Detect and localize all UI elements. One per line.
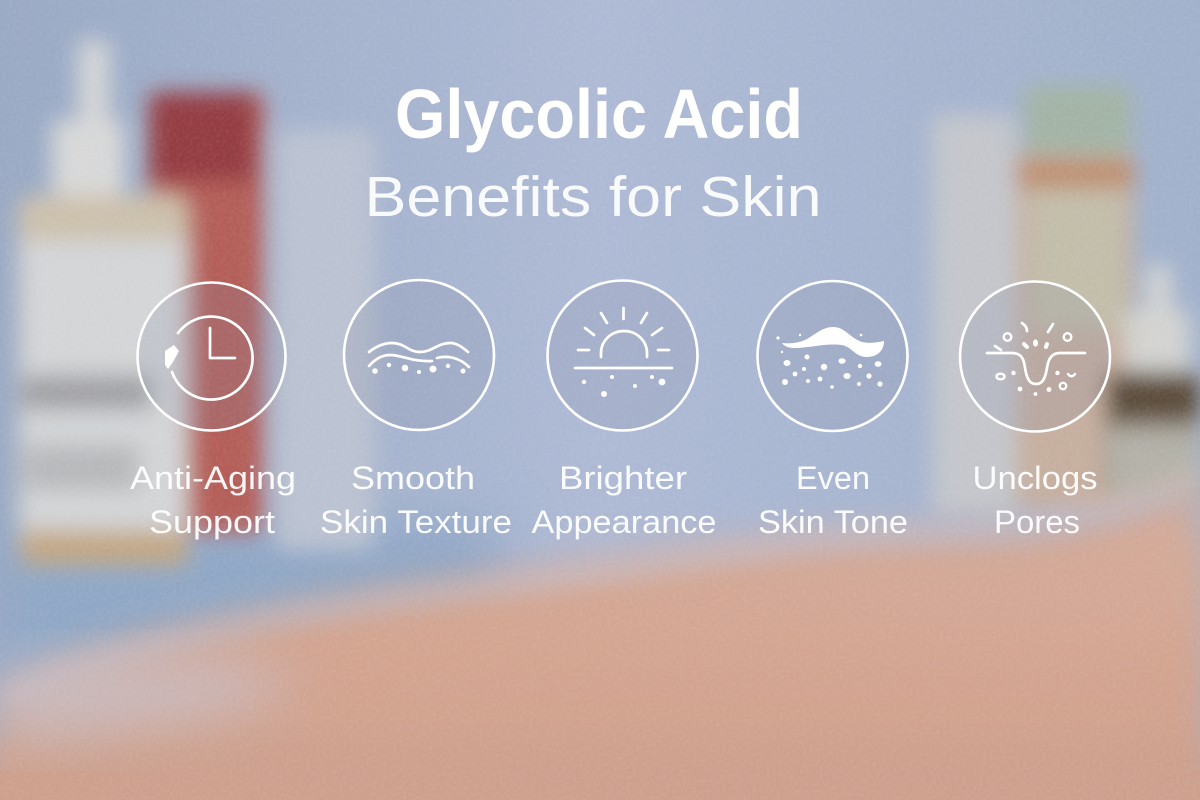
skin foreground xyxy=(0,480,1200,800)
benefit: Anti-Aging Support: Support xyxy=(149,504,275,540)
benefit: Smooth Skin Texture xyxy=(320,280,512,540)
benefit: Even Skin Tone: Skin Tone xyxy=(758,504,908,540)
benefit: Unclogs Pores: Pores xyxy=(994,504,1080,540)
label: Brighter xyxy=(559,460,687,496)
label: Even xyxy=(796,460,870,496)
icon: rising sun xyxy=(548,280,698,430)
right bottles xyxy=(932,85,1200,515)
benefit: Even Skin Tone xyxy=(758,281,908,540)
icon: even tone cream swipe xyxy=(758,281,908,431)
icon: smooth skin waves xyxy=(344,280,494,430)
label: Unclogs xyxy=(972,460,1098,496)
benefit: Smooth Skin Texture: Skin Texture xyxy=(320,504,512,540)
icon: clock with arrow xyxy=(138,282,286,430)
icon: unclogged pore xyxy=(960,282,1110,432)
benefit: Anti-Aging Support xyxy=(130,282,296,540)
subheading: Benefits for Skin: Benefits for Skin xyxy=(364,165,822,229)
heading: Glycolic Acid: Glycolic Acid xyxy=(395,75,803,153)
benefit: Unclogs Pores xyxy=(960,282,1110,540)
left bottles xyxy=(18,40,375,565)
benefit: Brighter Appearance xyxy=(532,280,716,540)
label: Smooth xyxy=(351,460,475,496)
title xyxy=(364,75,822,229)
label: Anti-Aging xyxy=(130,460,296,496)
benefit: Brighter Appearance: Appearance xyxy=(532,504,716,540)
